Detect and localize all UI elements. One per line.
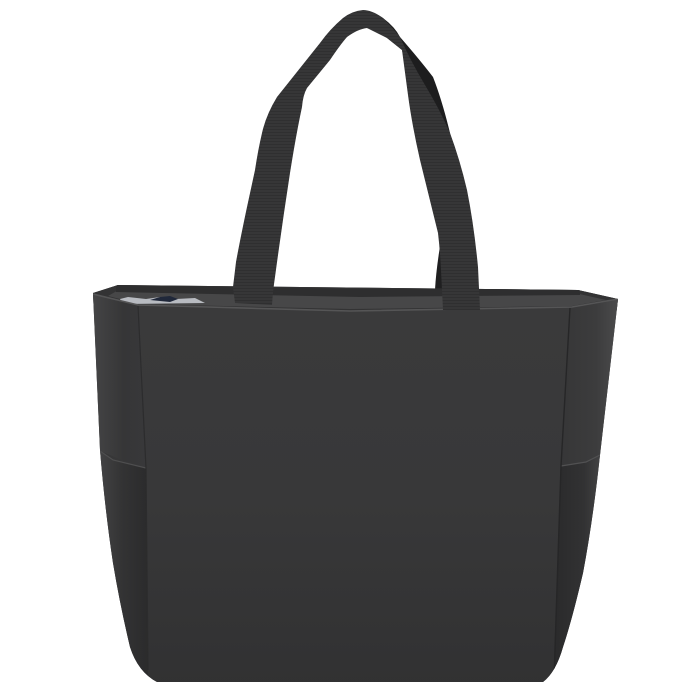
interior and top rim <box>93 285 618 310</box>
left pocket <box>100 452 148 676</box>
right side gusset <box>590 298 618 457</box>
right pocket <box>554 456 600 668</box>
right side seam <box>554 308 570 680</box>
left pocket hem <box>100 451 146 468</box>
front rim edge <box>93 294 618 311</box>
illustration: black tote bag <box>93 10 618 682</box>
front panel <box>148 668 554 682</box>
back handle sliver <box>383 18 452 292</box>
bag body <box>85 280 625 690</box>
base silhouette <box>85 280 625 690</box>
left side seam <box>138 306 148 608</box>
interior lining glimpse <box>120 297 205 304</box>
left side gusset <box>93 295 130 452</box>
right handle <box>367 12 480 310</box>
right pocket hem <box>561 455 600 466</box>
left handle <box>233 10 402 305</box>
